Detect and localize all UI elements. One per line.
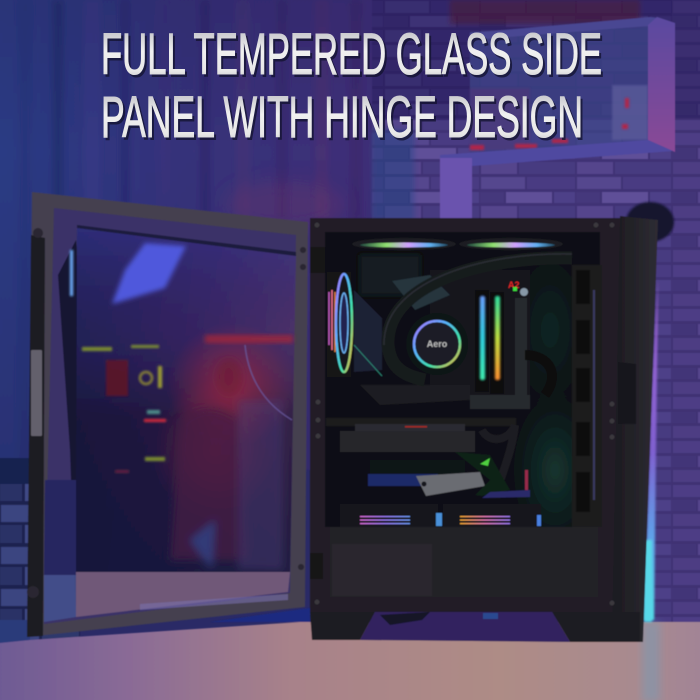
case body xyxy=(310,218,622,612)
motherboard vrm and cables xyxy=(470,298,552,409)
rear exhaust fan xyxy=(327,272,352,377)
case feet xyxy=(310,612,640,642)
right side fan cage xyxy=(572,265,602,527)
open tempered glass side panel xyxy=(27,192,308,637)
cpu water block xyxy=(406,313,468,375)
reflection: pc case in glass xyxy=(82,345,166,473)
shelf interior xyxy=(470,25,648,155)
bottom intake fans xyxy=(340,504,541,527)
blue light under case xyxy=(210,608,310,622)
vrm heatsink xyxy=(354,275,470,405)
table top xyxy=(0,622,700,700)
background: dark wall ledge and lower brick xyxy=(0,458,80,649)
main glass reflection xyxy=(76,225,297,572)
pc case xyxy=(310,216,658,642)
glass frame xyxy=(27,192,308,637)
rgb led strip behind case xyxy=(644,280,658,622)
glass corner screws xyxy=(27,228,306,598)
clear glass margin xyxy=(44,208,296,624)
lower left brick through glass xyxy=(44,480,76,575)
background: brick wall right xyxy=(372,0,700,625)
motherboard lower xyxy=(368,452,530,498)
shelf top edge xyxy=(470,17,658,40)
hinges xyxy=(310,247,325,579)
shelf support xyxy=(440,158,472,218)
reflection: ceiling light xyxy=(112,243,186,304)
case front panel xyxy=(612,216,658,642)
aio tubing xyxy=(388,258,572,380)
front panel notch xyxy=(618,362,636,424)
glass frame dark left edge xyxy=(27,235,45,637)
gpu power cables xyxy=(482,425,515,488)
table seen through glass xyxy=(76,572,290,617)
title xyxy=(101,22,604,152)
shelf right side xyxy=(648,17,675,152)
psu shroud xyxy=(330,527,598,597)
blue led strip reflection xyxy=(70,250,73,296)
debug led display xyxy=(508,280,528,296)
graphics card xyxy=(326,418,516,452)
cpu water block: Aero xyxy=(427,339,448,349)
case screws xyxy=(314,222,614,606)
debug led display: A2 xyxy=(508,280,520,290)
object on wall xyxy=(626,202,674,242)
view under case xyxy=(360,612,570,642)
ram modules xyxy=(475,290,504,394)
glass dark wedge xyxy=(58,240,112,617)
door handle xyxy=(31,350,42,436)
background: curtain wall xyxy=(0,0,700,470)
shelf bottom plank xyxy=(440,140,673,168)
wall shelf xyxy=(440,17,675,242)
reflection: red glow xyxy=(153,323,297,520)
reflection: top dark edge xyxy=(77,225,296,256)
case interior xyxy=(325,232,602,550)
reflection: person xyxy=(170,359,283,570)
top radiator fans xyxy=(352,238,563,250)
